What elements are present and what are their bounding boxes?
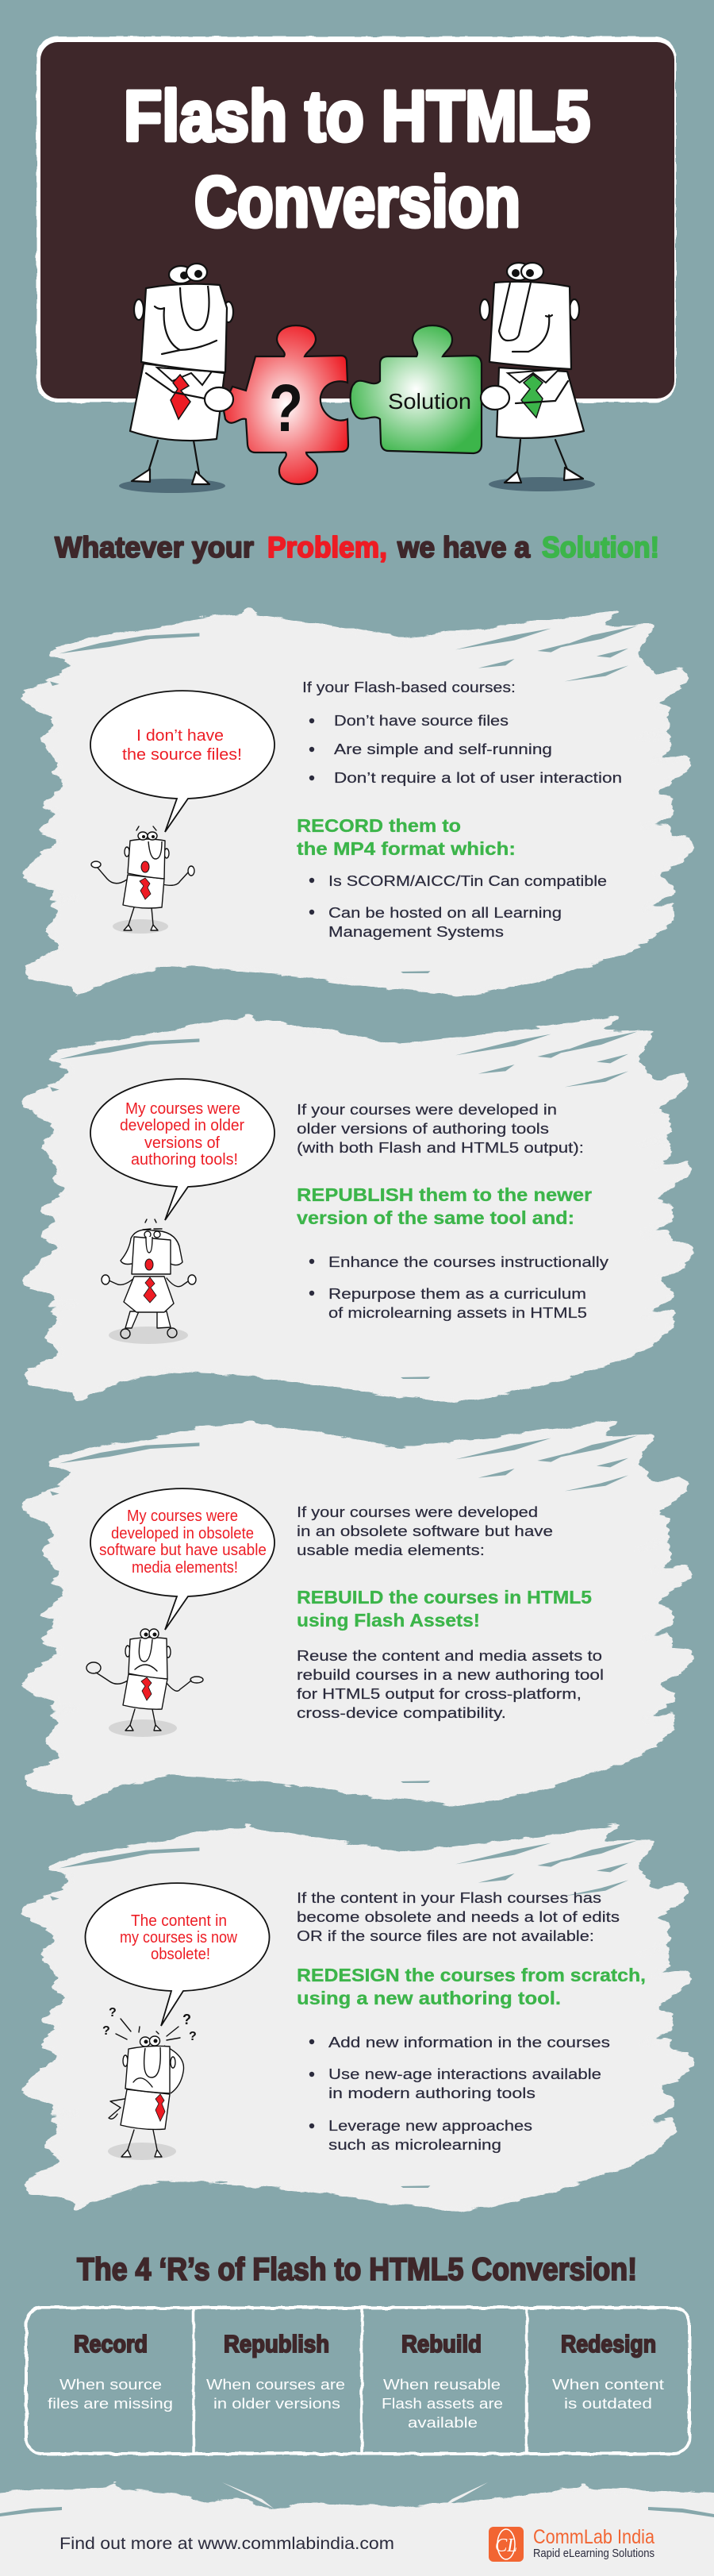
character: confused man: ? (182, 2012, 191, 2027)
text: benefits (309, 872, 607, 940)
text: benefits: Management Systems (328, 923, 504, 940)
text: benefits: Repurpose them as a curriculum (328, 1285, 586, 1302)
brush background (21, 608, 694, 998)
text: condition: (with both Flash and HTML5 output): (297, 1139, 584, 1156)
text: benefits: Leverage new approaches (328, 2117, 532, 2134)
table frame (26, 2308, 689, 2454)
panel: rebuild (21, 1418, 694, 1808)
text: condition: older versions of authoring tools (297, 1120, 549, 1137)
column: record: files are missing (48, 2395, 173, 2412)
text: benefits: Use new-age interactions available (328, 2066, 601, 2082)
footer link text: Find out more at www.commlabindia.com (60, 2535, 394, 2553)
column: record (48, 2330, 173, 2412)
column: redesign (552, 2330, 664, 2412)
tagline: Whatever your (55, 531, 254, 564)
speech bubble: software but have usable (99, 1542, 267, 1559)
illustration: left hand (205, 387, 233, 411)
text: benefits (309, 1253, 609, 1321)
tagline: Solution! (542, 531, 659, 564)
panel: record (21, 608, 694, 998)
character: shrugging man (91, 826, 194, 934)
column: republish: Republish (224, 2330, 329, 2358)
illustration: red puzzle piece with question mark (223, 325, 348, 484)
column: record: Record (74, 2330, 148, 2358)
logo wordmark: Rapid eLearning Solutions (533, 2547, 654, 2560)
heading: rebuild: REBUILD the courses in HTML5 (297, 1587, 592, 1608)
heading: redesign: REDESIGN the courses from scratch, (297, 1965, 646, 1985)
brush background (21, 1418, 694, 1808)
character: worried woman (102, 1219, 196, 1344)
text: benefits: Can be hosted on all Learning (328, 904, 562, 921)
column: rebuild (382, 2330, 503, 2431)
speech bubble: I don’t have (136, 727, 224, 745)
text: condition (297, 1504, 553, 1558)
text: benefits: Enhance the courses instructionally (328, 1253, 609, 1270)
speech bubble: My courses were (127, 1507, 238, 1525)
heading: republish: REPUBLISH them to the newer (297, 1184, 592, 1205)
column: rebuild: Rebuild (401, 2330, 482, 2358)
illustration: right man (480, 263, 595, 491)
column: republish (206, 2330, 345, 2412)
speech bubble: developed in older (120, 1117, 244, 1134)
column: rebuild: Flash assets are (382, 2395, 503, 2412)
text: condition (297, 1889, 620, 1944)
speech bubble: versions of (144, 1134, 220, 1152)
text: condition: If the content in your Flash courses has (297, 1889, 601, 1906)
chalkboard panel (36, 37, 676, 402)
text: description: Reuse the content and media assets to (297, 1647, 602, 1664)
character: confused man (102, 2006, 197, 2160)
tagline: Problem, (267, 531, 387, 564)
text: description (297, 1647, 604, 1721)
speech bubble: The content in (131, 1912, 227, 1930)
panel: republish (21, 1014, 694, 1404)
logo wordmark (533, 2526, 654, 2560)
speech bubble: media elements! (132, 1559, 238, 1577)
text: description: for HTML5 output for cross-platform, (297, 1685, 582, 1702)
column: rebuild: available (408, 2414, 478, 2431)
text: benefits: in modern authoring tools (328, 2085, 536, 2101)
text: condition: usable media elements: (297, 1542, 485, 1558)
text: benefits: of microlearning assets in HTML5 (328, 1304, 587, 1321)
text: condition (297, 1101, 584, 1156)
logo mark (489, 2527, 524, 2562)
speech bubble: developed in obsolete (111, 1525, 254, 1542)
illustration: right hand (481, 386, 509, 410)
speech bubble (90, 1079, 274, 1220)
heading: record (297, 815, 516, 859)
column: redesign: When content (552, 2376, 664, 2393)
text: condition: If your Flash-based courses: (302, 679, 516, 695)
heading: republish: version of the same tool and: (297, 1207, 574, 1228)
title (124, 77, 590, 242)
text: benefits (309, 2034, 610, 2153)
heading: record: RECORD them to (297, 815, 461, 836)
character: confused man: ? (109, 2006, 117, 2020)
footer brush (0, 2482, 714, 2576)
heading: redesign (297, 1965, 646, 2008)
illustration: red puzzle piece with question mark: ? (269, 371, 303, 445)
column: redesign: Redesign (561, 2330, 656, 2358)
heading: redesign: using a new authoring tool. (297, 1988, 561, 2008)
illustration: green puzzle piece with Solution label (351, 325, 482, 453)
text: condition: If your courses were developed in (297, 1101, 557, 1118)
illustration: green puzzle piece with Solution label: Solution (388, 389, 471, 414)
speech bubble: the source files! (122, 746, 242, 764)
character: sad man (86, 1629, 203, 1737)
heading: the 4 Rs: The 4 ‘R’s of Flash to HTML5 Conversion! (77, 2252, 637, 2287)
column: republish: in older versions (213, 2395, 340, 2412)
character: confused man: ? (189, 2030, 197, 2043)
text: condition: If your courses were developed (297, 1504, 538, 1520)
brush background (21, 1014, 694, 1404)
tagline: we have a (397, 531, 530, 564)
header section (36, 37, 676, 493)
speech bubble (90, 1488, 274, 1630)
text: description: cross-device compatibility. (297, 1704, 506, 1721)
speech bubble: obsolete! (151, 1946, 210, 1963)
text: condition: Don’t require a lot of user interaction (334, 769, 622, 786)
title: Flash to HTML5 (124, 77, 590, 156)
logo mark: CL (495, 2536, 517, 2556)
speech bubble (90, 691, 274, 832)
column: record: When source (60, 2376, 162, 2393)
character: confused man: ? (102, 2024, 110, 2038)
panel: redesign (21, 1823, 694, 2212)
tagline (55, 531, 659, 564)
text: benefits: Is SCORM/AICC/Tin Can compatible (328, 872, 607, 889)
text: condition: Are simple and self-running (334, 741, 552, 757)
text: condition: become obsolete and needs a lot of edits (297, 1908, 620, 1925)
text: description: rebuild courses in a new authoring tool (297, 1666, 604, 1683)
speech bubble: My courses were (125, 1100, 240, 1118)
illustration: left man (119, 264, 233, 493)
text: condition (302, 679, 622, 786)
text: benefits: Add new information in the courses (328, 2034, 610, 2050)
column: redesign: is outdated (564, 2395, 652, 2412)
speech bubble: authoring tools! (131, 1151, 238, 1169)
footer panel (0, 2482, 714, 2576)
heading: rebuild: using Flash Assets! (297, 1610, 480, 1631)
speech bubble: my courses is now (120, 1929, 237, 1946)
brush background (21, 1823, 694, 2212)
panel: 4 Rs table (26, 2308, 689, 2454)
text: condition: Don’t have source files (334, 712, 509, 729)
text: condition: OR if the source files are not available: (297, 1927, 594, 1944)
speech bubble (86, 1883, 270, 2026)
column: rebuild: When reusable (383, 2376, 501, 2393)
heading: republish (297, 1184, 592, 1228)
logo wordmark: CommLab India (533, 2526, 654, 2548)
heading: record: the MP4 format which: (297, 838, 516, 859)
text: benefits: such as microlearning (328, 2136, 501, 2153)
column: republish: When courses are (206, 2376, 345, 2393)
text: condition: in an obsolete software but have (297, 1523, 553, 1539)
title: Conversion (194, 163, 520, 242)
heading: rebuild (297, 1587, 592, 1631)
